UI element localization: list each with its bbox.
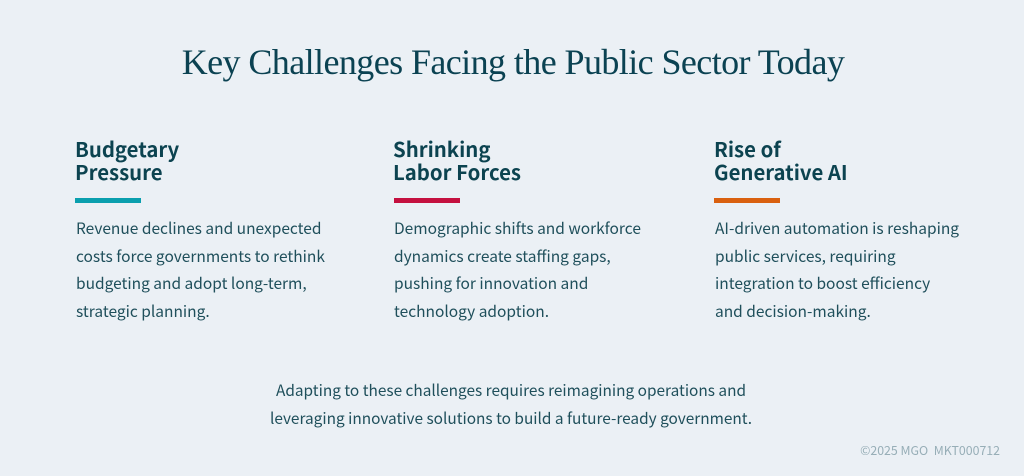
text: rise of generative AI description: integration to boost efficiency (715, 272, 930, 294)
text: rise of generative AI description: and decision-making. (715, 300, 871, 322)
panel: rise of generative AI (714, 133, 959, 322)
text: shrinking labor forces description: Demographic shifts and workforce (394, 217, 641, 239)
heading: budgetary pressure: Budgetary (75, 133, 179, 163)
title: Key Challenges Facing the Public Sector Today (182, 42, 844, 82)
text: budgetary pressure description: costs force governments to rethink (76, 245, 325, 267)
copyright note: ©2025 MGO MKT000712 (860, 441, 1000, 459)
panel: budgetary pressure (75, 133, 325, 322)
text: rise of generative AI description (715, 217, 959, 322)
accent bar: teal (75, 198, 141, 203)
text: shrinking labor forces description: technology adoption. (394, 300, 549, 322)
text: budgetary pressure description: budgeting and adopt long-term, (76, 272, 307, 294)
accent bar: orange (714, 198, 780, 203)
heading: rise of generative AI: Rise of (714, 133, 781, 163)
closing statement: leveraging innovative solutions to build a future-ready government. (270, 406, 752, 428)
text: shrinking labor forces description: pushing for innovation and (394, 272, 588, 294)
text: shrinking labor forces description: dynamics create staffing gaps, (394, 245, 611, 267)
accent bar: crimson (394, 198, 460, 203)
heading: rise of generative AI: Generative AI (714, 156, 848, 186)
heading: shrinking labor forces (393, 133, 521, 186)
heading: budgetary pressure: Pressure (75, 156, 163, 186)
text: rise of generative AI description: AI-driven automation is reshaping (715, 217, 959, 239)
text: shrinking labor forces description (394, 217, 641, 322)
heading: rise of generative AI (714, 133, 848, 186)
heading: shrinking labor forces: Labor Forces (393, 156, 521, 186)
heading: shrinking labor forces: Shrinking (393, 133, 490, 163)
text: rise of generative AI description: public services, requiring (715, 245, 896, 267)
text: budgetary pressure description: strategic planning. (76, 300, 210, 322)
panel: shrinking labor forces (393, 133, 641, 322)
closing statement: Adapting to these challenges requires reimagining operations and (276, 379, 746, 401)
text: budgetary pressure description (76, 217, 325, 322)
text: budgetary pressure description: Revenue declines and unexpected (76, 217, 321, 239)
closing statement (270, 379, 752, 428)
heading: budgetary pressure (75, 133, 179, 186)
